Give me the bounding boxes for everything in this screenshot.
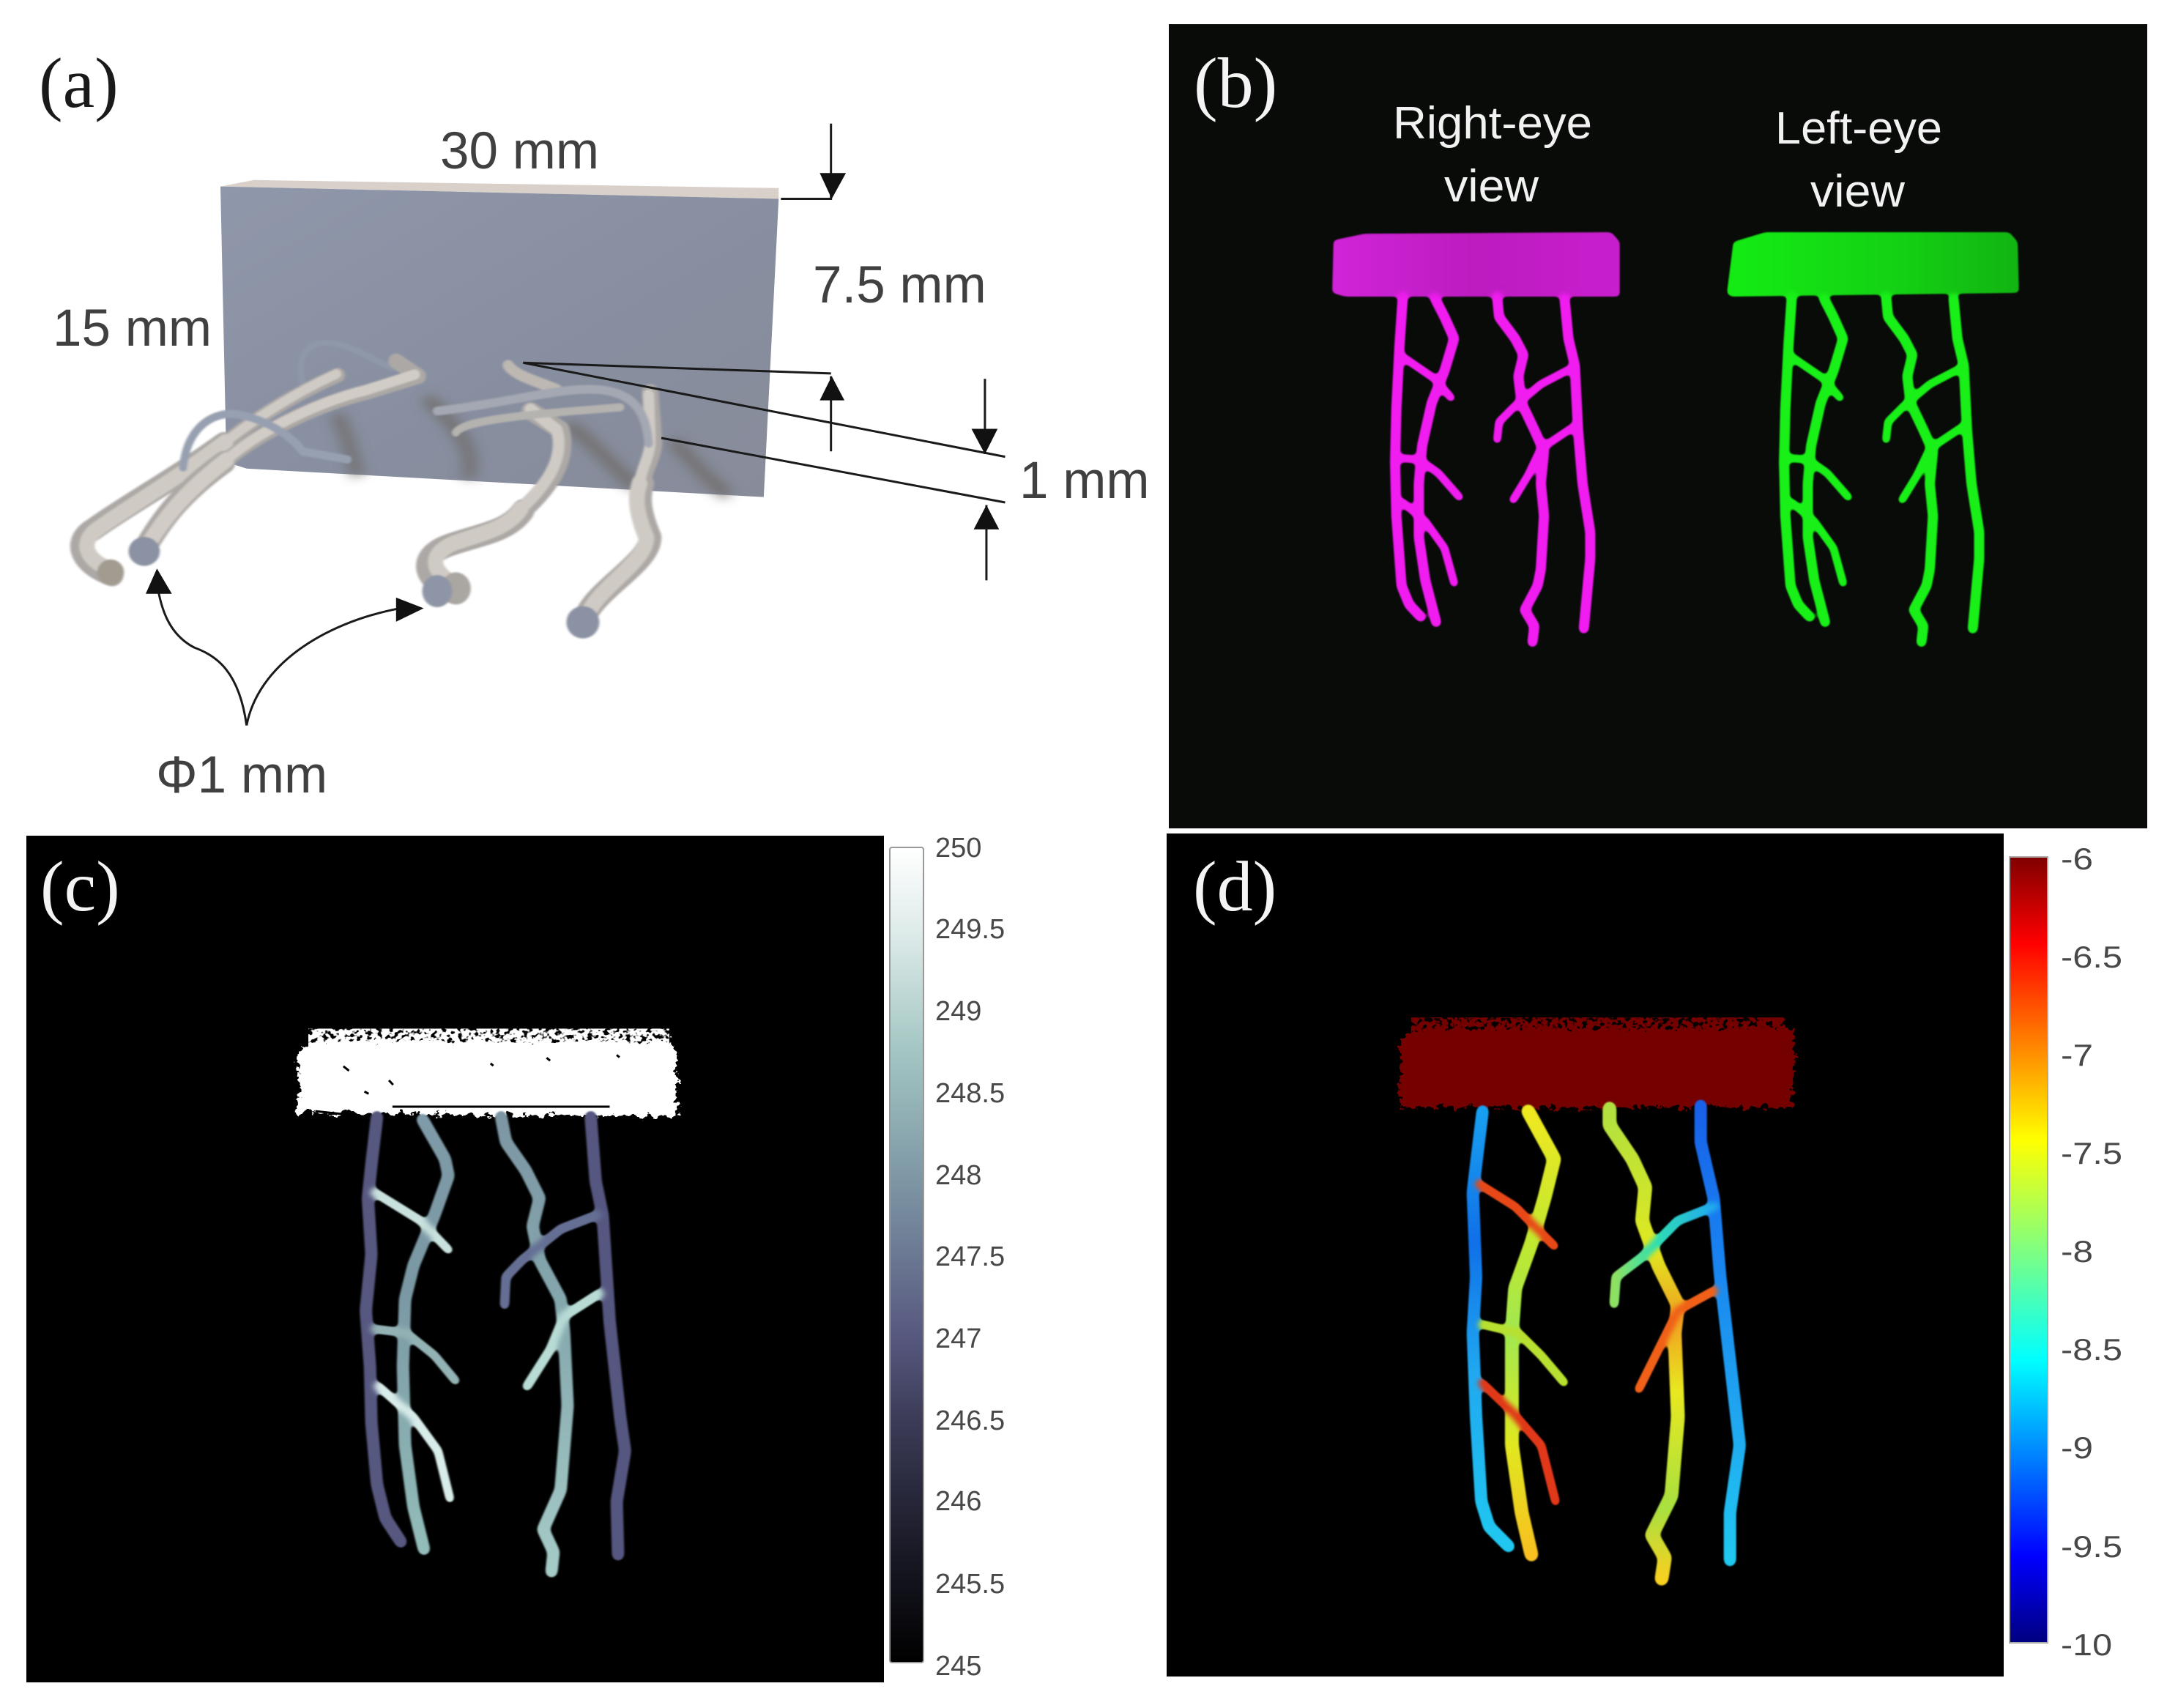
colorbar d tick labels: -7 — [2061, 1038, 2093, 1072]
colour-coded vessels — [1400, 1017, 1795, 1579]
dimension: 30 mm: 30 mm — [440, 122, 599, 180]
colorbar d tick labels: -6.5 — [2061, 940, 2122, 974]
colorbar c tick labels: 247 — [935, 1323, 981, 1354]
panel d background — [1167, 833, 2004, 1677]
colorbar c tick labels: 249 — [935, 996, 981, 1027]
panel d label: (d) — [1193, 847, 1276, 927]
colorbar d tick labels — [2061, 842, 2122, 1662]
heading: left-eye view — [1775, 103, 1942, 217]
panel b: stereo views — [1169, 24, 2147, 828]
colorbar c tick labels: 245.5 — [935, 1569, 1005, 1600]
colorbar d tick labels: -8.5 — [2061, 1332, 2122, 1367]
colorbar d tick labels: -7.5 — [2061, 1136, 2122, 1170]
panel c background — [26, 836, 884, 1682]
colorbar c — [890, 847, 923, 1663]
panel b background — [1169, 24, 2147, 828]
dimension lines and arrows — [146, 124, 1005, 725]
colorbar c tick labels — [935, 833, 1005, 1682]
heading: right-eye view — [1393, 98, 1592, 212]
model plate and vessels — [81, 180, 778, 639]
dimension: diameter 1 mm: Φ1 mm — [156, 746, 327, 804]
colorbar d — [2010, 857, 2048, 1643]
dimension: 7.5 mm: 7.5 mm — [813, 256, 986, 314]
colorbar d tick labels: -10 — [2061, 1627, 2112, 1662]
colorbar c tick labels: 248.5 — [935, 1078, 1005, 1109]
colorbar d tick labels: -8 — [2061, 1234, 2093, 1269]
colorbar d tick labels: -6 — [2061, 842, 2093, 876]
colorbar c tick labels: 247.5 — [935, 1241, 1005, 1272]
colorbar c tick labels: 245 — [935, 1651, 981, 1682]
colorbar c tick labels: 248 — [935, 1160, 981, 1191]
colorbar d tick labels: -9 — [2061, 1430, 2093, 1465]
heading: left-eye view: Left-eye — [1775, 103, 1942, 154]
colorbar c tick labels: 246.5 — [935, 1406, 1005, 1436]
colorbar c tick labels: 246 — [935, 1486, 981, 1517]
colorbar c tick labels: 250 — [935, 833, 981, 864]
heading: left-eye view: view — [1810, 166, 1905, 217]
right-eye magenta vessels — [1332, 232, 1620, 642]
dimension: 15 mm: 15 mm — [53, 300, 212, 357]
panel d: colour-coded map — [1167, 833, 2122, 1677]
heading: right-eye view: view — [1444, 161, 1539, 212]
heading: right-eye view: Right-eye — [1393, 98, 1592, 149]
dimension: 1 mm: 1 mm — [1019, 452, 1150, 510]
panel c label: (c) — [40, 847, 120, 927]
colorbar d tick labels: -9.5 — [2061, 1529, 2122, 1564]
panel b label: (b) — [1194, 44, 1277, 123]
panel c: grayscale depth map — [26, 833, 1005, 1682]
depth map vessels — [298, 1028, 676, 1572]
panel a label: (a) — [39, 44, 119, 123]
colorbar c tick labels: 249.5 — [935, 914, 1005, 945]
panel a: 3D vessel model — [39, 44, 1150, 804]
left-eye green vessels — [1727, 232, 2019, 642]
